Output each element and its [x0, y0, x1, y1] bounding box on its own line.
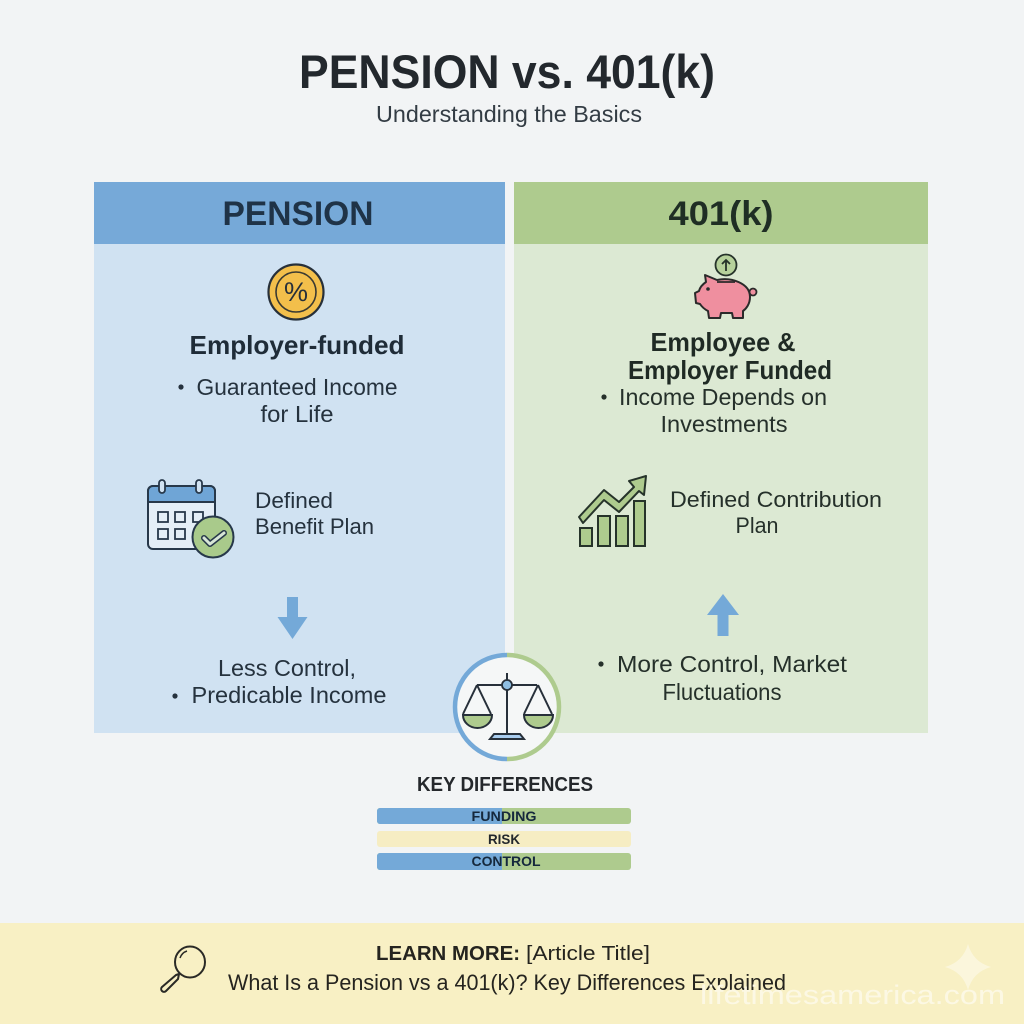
- heading: key differences: KEY DIFFERENCES: [417, 774, 593, 796]
- text: learn more: LEARN MORE:: [376, 943, 520, 965]
- icon: growth chart: [579, 476, 646, 546]
- bar: funding: [377, 808, 631, 824]
- text: more control: Fluctuations: [662, 679, 782, 705]
- icon: up arrow: [707, 594, 739, 636]
- heading: employee and employer funded: [628, 327, 832, 385]
- text: defined benefit plan: Benefit Plan: [255, 514, 374, 539]
- icon: percent coin: [268, 264, 324, 320]
- icon: balance scale badge: [455, 655, 559, 759]
- panel: pension: [94, 182, 505, 733]
- heading: employer-funded: Employer-funded: [190, 330, 404, 360]
- panel heading: 401(k): [514, 182, 928, 244]
- bar: risk: RISK: [488, 831, 520, 847]
- bar: control: [377, 853, 631, 870]
- text: defined contribution plan: [670, 487, 882, 538]
- bar: funding: FUNDING: [472, 808, 537, 824]
- text: income depends on investments: Investments: [660, 411, 788, 437]
- panel heading: 401(k): 401(k): [668, 195, 774, 233]
- text: defined contribution plan: Plan: [736, 513, 778, 538]
- icon: magnifying glass: [161, 946, 205, 992]
- text: income depends on investments: [601, 384, 827, 437]
- text: learn more: [Article Title]: [526, 943, 650, 965]
- text: article title: What Is a Pension vs a 401(k)? Key Differences Explained: [228, 970, 786, 995]
- text: learn more: [376, 943, 650, 965]
- watermark text: lifetimesamerica.com: [700, 980, 1005, 1010]
- subtitle: Understanding the Basics: [376, 101, 642, 127]
- icon: calendar with check: [148, 480, 234, 558]
- text: defined benefit plan: [255, 488, 374, 539]
- panel heading: pension: PENSION: [222, 195, 374, 233]
- text: more control: More Control, Market: [617, 651, 848, 677]
- heading: employee and employer funded: Employer Funded: [628, 355, 832, 385]
- text: guaranteed income: for Life: [260, 401, 334, 427]
- text: defined contribution plan: Defined Contribution: [670, 487, 882, 512]
- text: defined benefit plan: Defined: [255, 488, 333, 513]
- heading: employee and employer funded: Employee &: [650, 327, 796, 357]
- title: PENSION vs. 401(k): [299, 45, 715, 98]
- bar: risk: [377, 831, 631, 847]
- panel heading: pension: [94, 182, 505, 244]
- text: less control: Less Control,: [218, 655, 356, 681]
- footer banner: [0, 923, 1024, 1024]
- watermark sparkle: [945, 944, 991, 990]
- text: more control: [598, 651, 848, 705]
- text: guaranteed income: Guaranteed Income: [196, 374, 398, 400]
- text: less control: Predicable Income: [192, 682, 386, 708]
- icon: piggy bank with coin: [695, 254, 756, 318]
- text: income depends on investments: Income Depends on: [619, 384, 827, 410]
- icon: down arrow: [278, 597, 308, 639]
- text: less control: [172, 655, 386, 708]
- bar: control: CONTROL: [472, 853, 541, 869]
- text: guaranteed income: [178, 374, 398, 427]
- icon: percent coin: %: [284, 277, 308, 307]
- panel: 401(k): [514, 182, 928, 733]
